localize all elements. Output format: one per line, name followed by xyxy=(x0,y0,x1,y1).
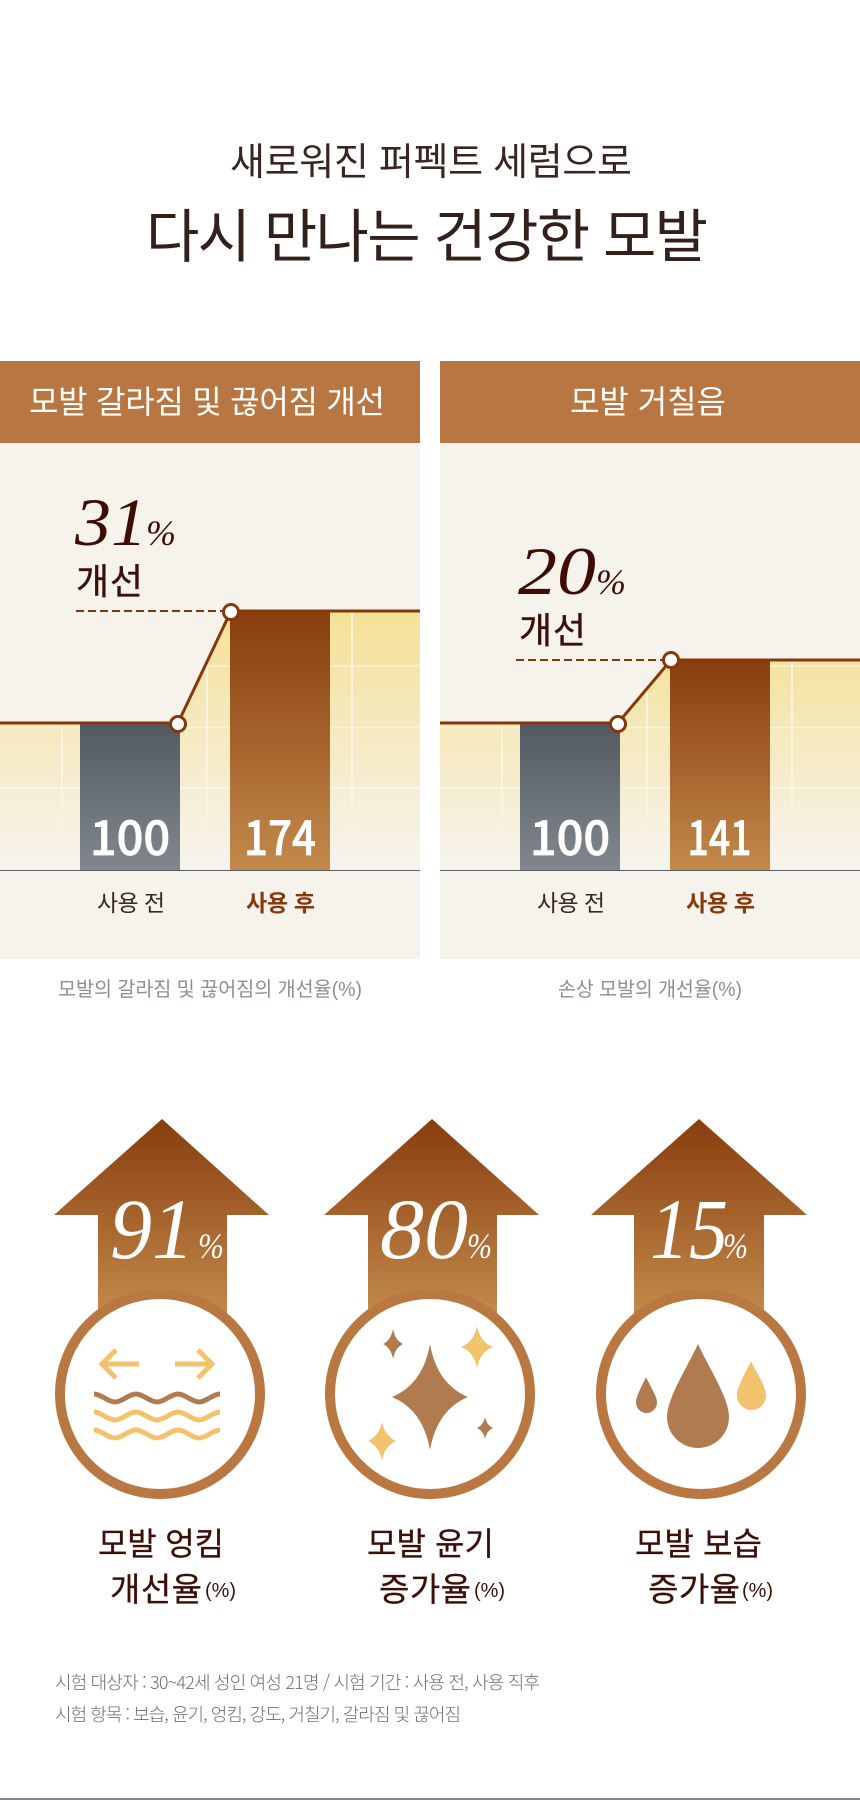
title xyxy=(146,131,708,274)
label xyxy=(635,1519,773,1611)
panel header xyxy=(0,361,420,443)
panel header: 모발 갈라짐 및 끊어짐 개선 xyxy=(29,377,385,423)
axis label: after: 사용 후 xyxy=(686,884,755,918)
value: 91 xyxy=(110,1181,194,1277)
line chart with markers xyxy=(0,604,420,732)
axis label: before: 사용 전 xyxy=(537,884,605,918)
metric: shine 80% xyxy=(324,1119,539,1611)
label: (%) xyxy=(742,1580,773,1602)
value: % xyxy=(723,1226,748,1266)
panel header: 모발 거칠음 xyxy=(570,377,726,423)
value: 80 xyxy=(380,1181,468,1277)
callout: 31% improvement: % xyxy=(146,513,176,553)
ring xyxy=(330,1294,530,1494)
panel background xyxy=(0,361,420,959)
callout: 20% improvement xyxy=(518,533,626,654)
up arrow xyxy=(324,1119,539,1330)
caption: left chart: 모발의 갈라짐 및 끊어짐의 개선율(%) xyxy=(58,978,362,1001)
label: 모발 보습 xyxy=(635,1519,762,1565)
label: 증가율 xyxy=(648,1563,740,1611)
ring xyxy=(601,1294,801,1494)
bar: before 100 xyxy=(80,723,180,871)
bottom rule xyxy=(0,1798,860,1800)
line chart with markers xyxy=(440,652,860,732)
ring xyxy=(60,1294,260,1494)
callout: 31% improvement: 31 xyxy=(74,484,147,560)
baseline xyxy=(0,870,420,871)
panel: hair split and breakage xyxy=(0,361,420,959)
bar: after 141: 141 xyxy=(688,800,752,869)
bar: before 100: 100 xyxy=(90,800,170,869)
value: % xyxy=(198,1226,224,1266)
label: 증가율 xyxy=(379,1563,471,1611)
value: % xyxy=(467,1226,492,1266)
icon: detangle arrows and waves xyxy=(94,1350,220,1438)
label: 모발 윤기 xyxy=(367,1519,494,1565)
panel background xyxy=(440,361,860,959)
bar: before 100 xyxy=(520,723,620,871)
callout: 20% improvement: 개선 xyxy=(519,602,586,654)
footnote xyxy=(55,1669,540,1727)
callout: 31% improvement: 개선 xyxy=(76,553,143,605)
label: 개선율 xyxy=(110,1563,202,1611)
label: 모발 엉킴 xyxy=(98,1519,224,1565)
bar: after 174 xyxy=(230,611,330,871)
panel: hair roughness xyxy=(440,361,860,959)
caption: right chart: 손상 모발의 개선율(%) xyxy=(558,978,742,1001)
metric: moisture 15% xyxy=(591,1119,807,1611)
callout: 20% improvement: 20 xyxy=(518,533,596,609)
footnote line 2: 시험 항목 : 보습, 윤기, 엉킴, 강도, 거칠기, 갈라짐 및 끊어짐 xyxy=(55,1701,461,1727)
up arrow xyxy=(54,1119,269,1330)
label xyxy=(367,1519,505,1611)
bar: before 100: 100 xyxy=(530,800,610,869)
metric: detangling 91% xyxy=(54,1119,269,1611)
bar: after 141 xyxy=(670,660,770,871)
label xyxy=(98,1519,236,1611)
up arrow xyxy=(591,1119,807,1330)
footnote line 1: 시험 대상자 : 30~42세 성인 여성 21명 / 시험 기간 : 사용 전, 사용 직후 xyxy=(55,1669,540,1695)
label: (%) xyxy=(474,1580,505,1602)
title line 1: 새로워진 퍼펙트 세럼으로 xyxy=(230,131,632,186)
axis label: before: 사용 전 xyxy=(97,884,165,918)
label: (%) xyxy=(205,1580,236,1602)
callout: 31% improvement xyxy=(74,484,176,605)
panel header xyxy=(440,361,860,443)
bar: after 174: 174 xyxy=(244,800,316,869)
title line 2: 다시 만나는 건강한 모발 xyxy=(146,190,708,274)
area chart fill with grid xyxy=(440,660,860,871)
callout: 20% improvement: % xyxy=(596,562,626,602)
baseline xyxy=(440,870,860,871)
icon: water drops xyxy=(636,1344,766,1448)
icon: sparkles xyxy=(368,1326,493,1460)
axis label: after: 사용 후 xyxy=(246,884,315,918)
area chart fill with grid xyxy=(0,611,420,871)
value: 15 xyxy=(650,1181,728,1277)
